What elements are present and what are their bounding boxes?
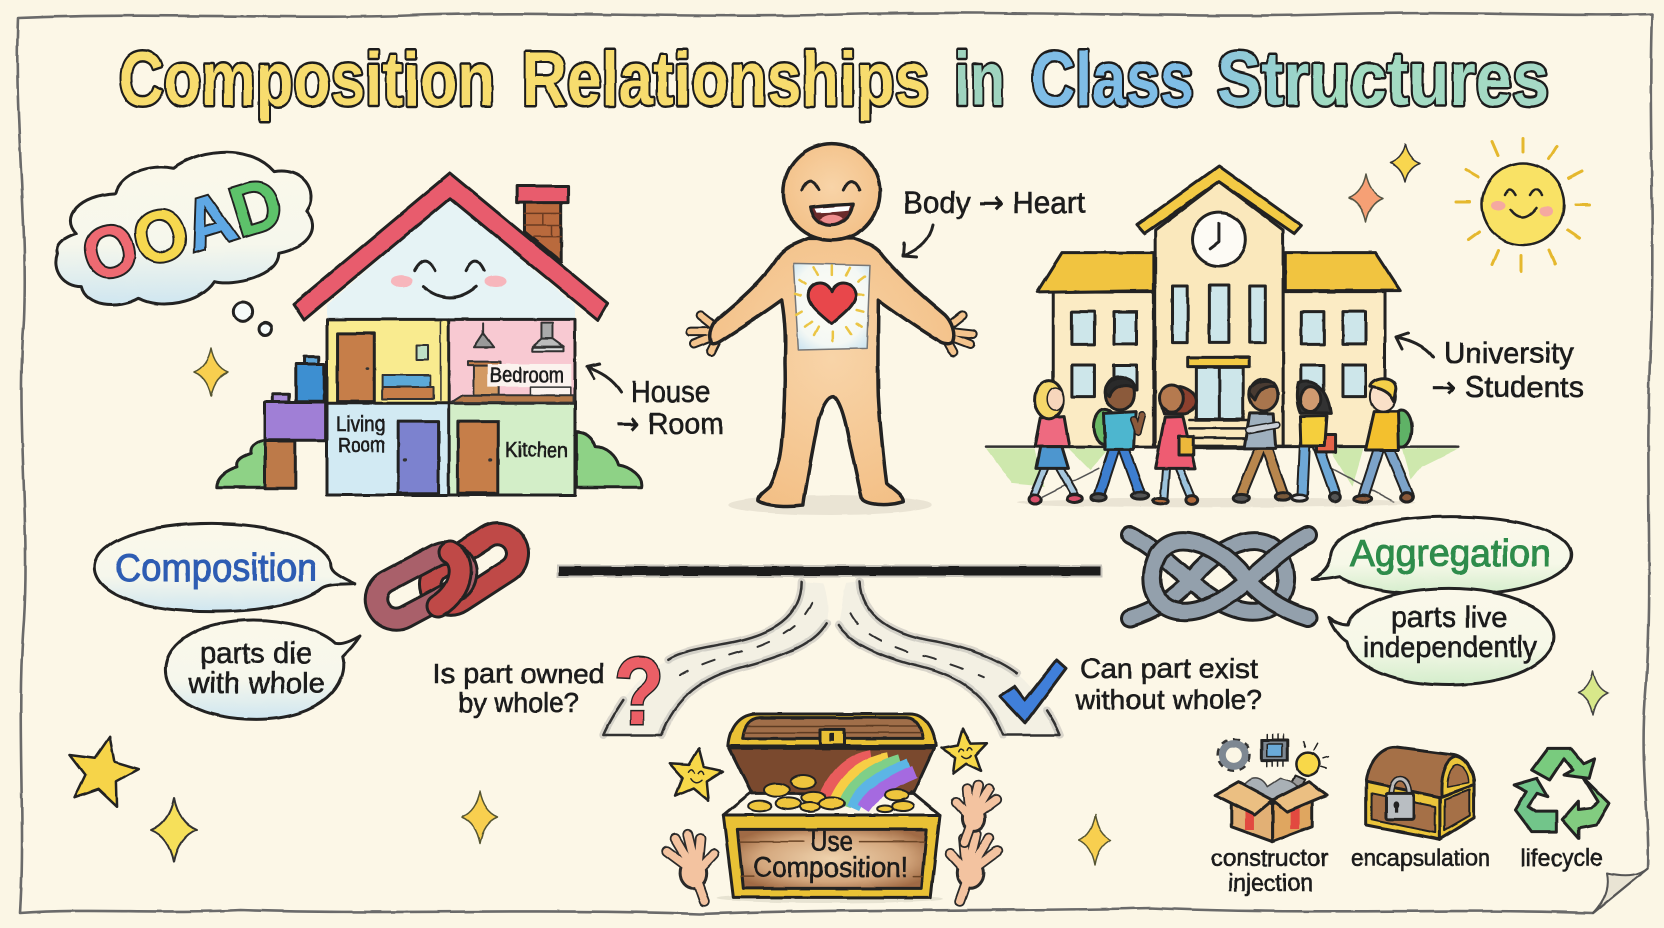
label: University to Students with arrow: [1396, 333, 1584, 405]
bubble: parts live independently: parts live: [1391, 601, 1508, 634]
chest label: [753, 826, 908, 884]
label: Body to Heart with arrow: Body → Heart: [903, 185, 1085, 221]
roof: [293, 173, 608, 320]
composition heading bubble: [95, 523, 355, 612]
question: can part exist: Can part exist: [1080, 653, 1258, 684]
title: [119, 37, 1549, 122]
icon: encapsulation locked chest: [1351, 747, 1490, 872]
blue check icon: [1000, 660, 1066, 723]
aggregation heading bubble: Aggregation: [1350, 533, 1551, 575]
student 1: [1029, 381, 1083, 504]
question: is part owned: [433, 658, 605, 718]
icon: lifecycle recycling arrows: [1514, 748, 1609, 872]
gold coins: [749, 775, 914, 812]
school illustration: [986, 166, 1459, 507]
cheering hand lower left: [667, 834, 714, 901]
sun: [1456, 138, 1590, 272]
rainbow: [825, 756, 915, 808]
light bulb: [1291, 742, 1328, 788]
label: Body to Heart with arrow: [903, 185, 1085, 257]
room labels: Bedroom: [490, 364, 564, 387]
gear: [1219, 741, 1248, 769]
thought cloud: OOAD: OOAD: [73, 162, 292, 298]
question: is part owned: Is part owned: [433, 658, 605, 689]
windows: [1072, 285, 1366, 397]
label: House to Room with arrow: House: [631, 374, 710, 409]
student 2: [1091, 377, 1149, 501]
tower: [1137, 166, 1301, 447]
smiling star right: [940, 727, 990, 775]
floor shadow: [717, 894, 943, 903]
central balance divider: [557, 564, 1102, 578]
torso and limbs: [710, 238, 954, 506]
title: Structures: [1217, 37, 1549, 122]
bushes: [217, 432, 642, 487]
chip: [1262, 734, 1288, 767]
student 4: [1233, 379, 1291, 502]
box: [1215, 778, 1327, 842]
bubble: parts die with whole: with whole: [187, 667, 325, 700]
house face: [390, 261, 507, 297]
chimney: [517, 186, 568, 262]
title: in: [954, 37, 1005, 122]
open lid: [728, 714, 936, 793]
question: can part exist: [1074, 653, 1262, 715]
label: University to Students with arrow: University: [1444, 337, 1574, 370]
lifecycle label: lifecycle: [1521, 845, 1603, 872]
chest label: Composition!: [753, 852, 908, 884]
chain icon: [369, 526, 525, 626]
wings: [1037, 253, 1400, 447]
question: can part exist: without whole?: [1074, 684, 1262, 715]
student 6: [1354, 379, 1413, 502]
entrance and steps: [1186, 357, 1255, 448]
chest window: [793, 263, 870, 350]
icon: constructor injection box: [1211, 734, 1328, 897]
walls and rooms: [327, 198, 575, 495]
room labels: Living: [336, 413, 385, 436]
head: [783, 144, 880, 240]
aggregation heading bubble: [1312, 517, 1571, 595]
title: Class: [1031, 37, 1194, 122]
constructor injection label: constructor: [1211, 845, 1328, 872]
bubble: parts live independently: independently: [1363, 631, 1537, 664]
title: Composition: [119, 37, 495, 122]
left road: [603, 582, 828, 735]
cheering hand upper right: [956, 785, 997, 842]
sparkle: top yellow: [1390, 144, 1420, 182]
figure: body with heart: [691, 144, 973, 515]
label: University to Students with arrow: → Students: [1431, 370, 1584, 405]
house illustration: [217, 173, 642, 495]
thought cloud: OOAD: [56, 152, 313, 335]
student 3: [1153, 385, 1198, 504]
face: [802, 182, 859, 225]
toy blocks: [265, 357, 326, 488]
room labels: Room: [338, 434, 385, 457]
heart glow rays: [795, 266, 865, 341]
bubble: parts die with whole: [165, 620, 360, 719]
cheering hand lower right: [950, 834, 997, 901]
title: Relationships: [522, 37, 929, 122]
room furniture: [338, 323, 574, 493]
room labels: Kitchen: [505, 439, 568, 462]
encapsulation label: encapsulation: [1351, 845, 1490, 872]
knot icon: [1130, 535, 1308, 618]
smiling star left: [665, 745, 725, 802]
sparkle: lower right: [1079, 815, 1111, 865]
constructor injection label: [1211, 845, 1328, 897]
fingers: [691, 315, 973, 352]
student 5: [1292, 381, 1341, 502]
heart: [808, 283, 856, 324]
sparkle: green: [1578, 671, 1608, 715]
label: House to Room with arrow: [587, 364, 724, 442]
chest label: Use: [810, 826, 853, 858]
room labels: [336, 364, 568, 462]
question: is part owned: by whole?: [458, 687, 579, 718]
sparkle: pink: [1349, 174, 1383, 222]
forking road: [603, 582, 1060, 735]
sparkle: house: [194, 348, 228, 396]
composition heading bubble: Composition: [115, 547, 317, 590]
bubble: parts live independently: [1328, 588, 1554, 685]
decorative stars lower left: [61, 729, 498, 862]
constructor injection label: injection: [1228, 870, 1313, 897]
treasure chest: use composition: [717, 714, 943, 903]
label: House to Room with arrow: → Room: [616, 406, 724, 442]
ground shadow: [728, 495, 932, 515]
ground and lawn: [986, 447, 1459, 507]
chest front: [723, 792, 940, 897]
question mark icon: ?: [614, 638, 664, 745]
bubble: parts die with whole: parts die: [200, 637, 312, 670]
right road: [838, 582, 1060, 735]
